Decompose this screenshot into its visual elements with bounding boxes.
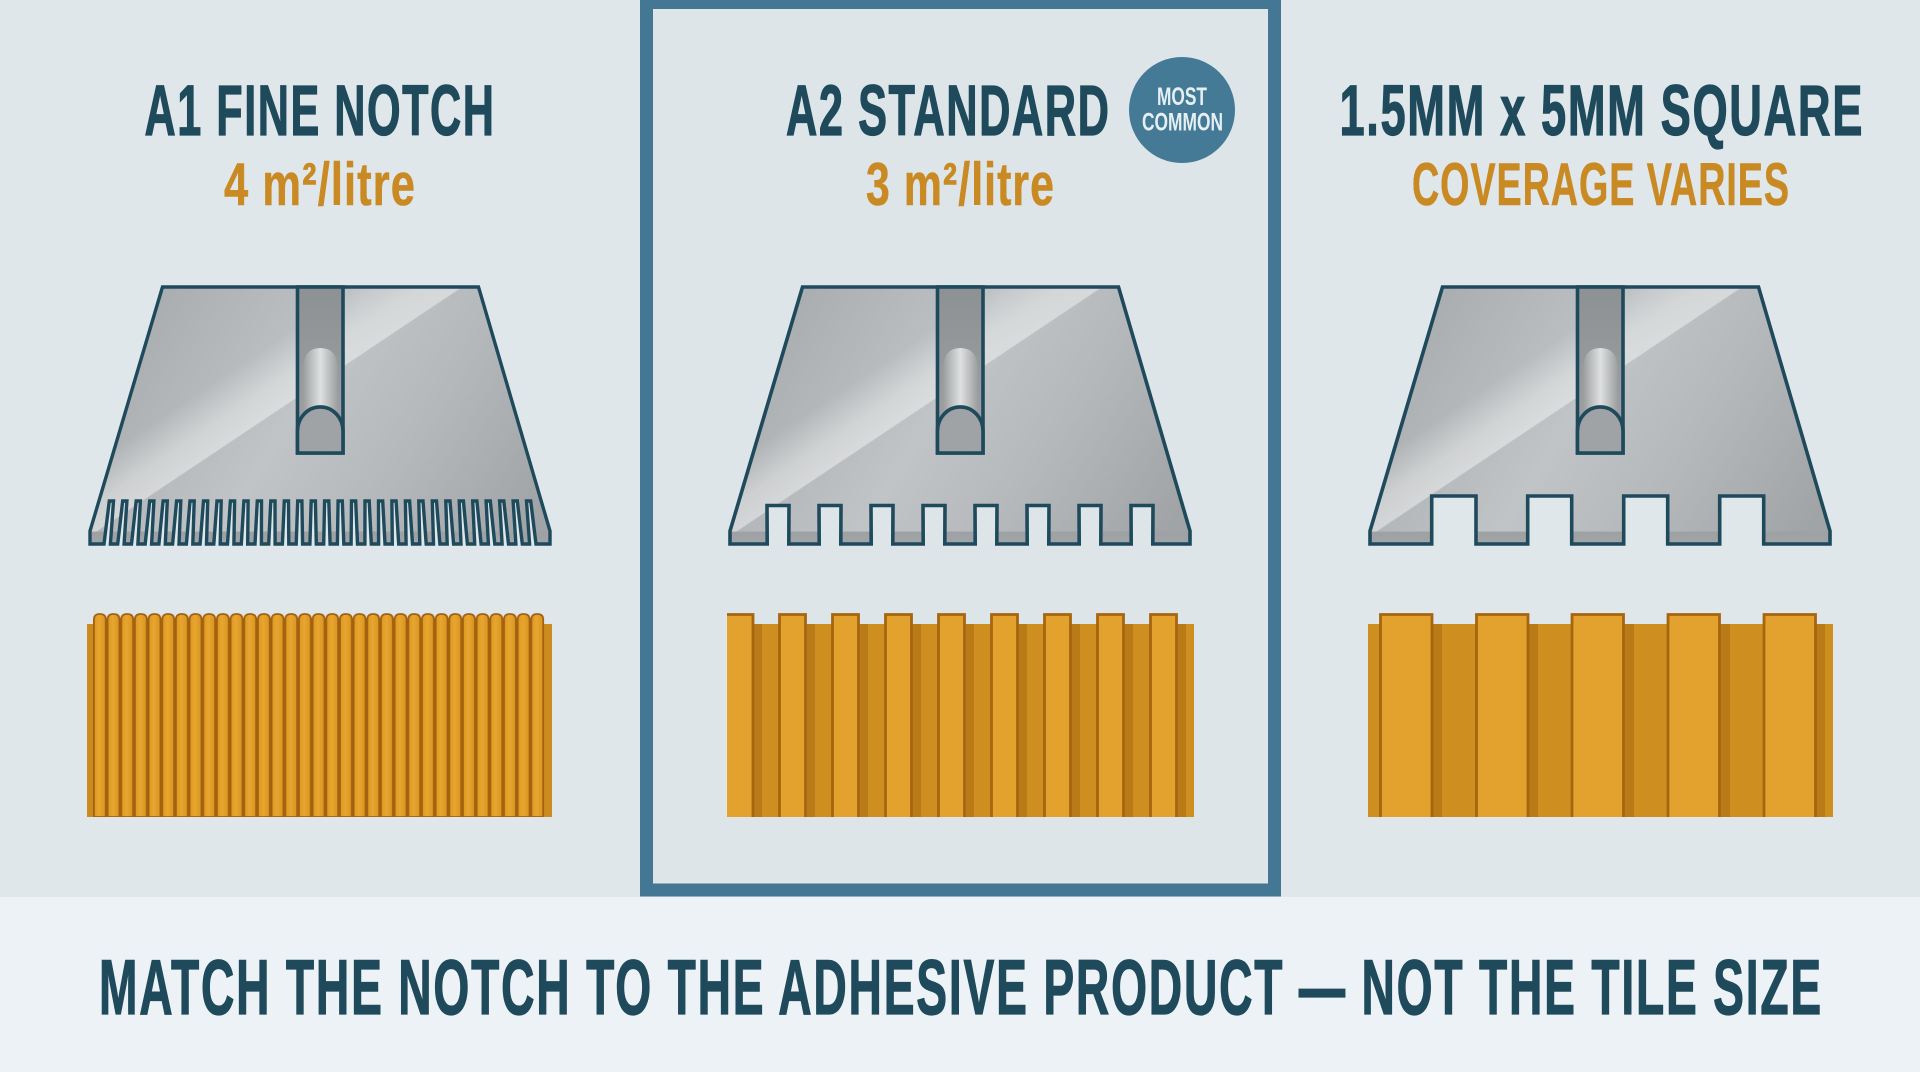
panel: A2 standard	[727, 57, 1235, 817]
icon: square notch trowel blade	[1370, 287, 1830, 544]
adhesive ridges: standard	[727, 614, 1194, 817]
heading: A2 standard: A2 STANDARD	[786, 72, 1110, 151]
highlight frame: A2 standard column	[646, 2, 1274, 890]
adhesive ridges: square	[1368, 614, 1833, 817]
panel: A1 fine notch	[87, 72, 552, 817]
icon: fine notch trowel blade	[90, 287, 550, 544]
coverage: 3 m2 per litre: 3 m²/litre	[866, 151, 1055, 218]
footer strip	[0, 897, 1920, 1072]
badge: most common: MOST	[1157, 83, 1207, 111]
icon: standard notch trowel blade	[730, 287, 1190, 544]
heading: A1 fine notch: A1 FINE NOTCH	[144, 72, 496, 151]
panel: 1.5mm x 5mm square	[1340, 72, 1864, 817]
badge: most common	[1129, 57, 1235, 163]
badge: most common: COMMON	[1142, 108, 1223, 136]
coverage: 4 m2 per litre: 4 m²/litre	[224, 151, 416, 218]
adhesive ridges: fine	[87, 613, 552, 817]
